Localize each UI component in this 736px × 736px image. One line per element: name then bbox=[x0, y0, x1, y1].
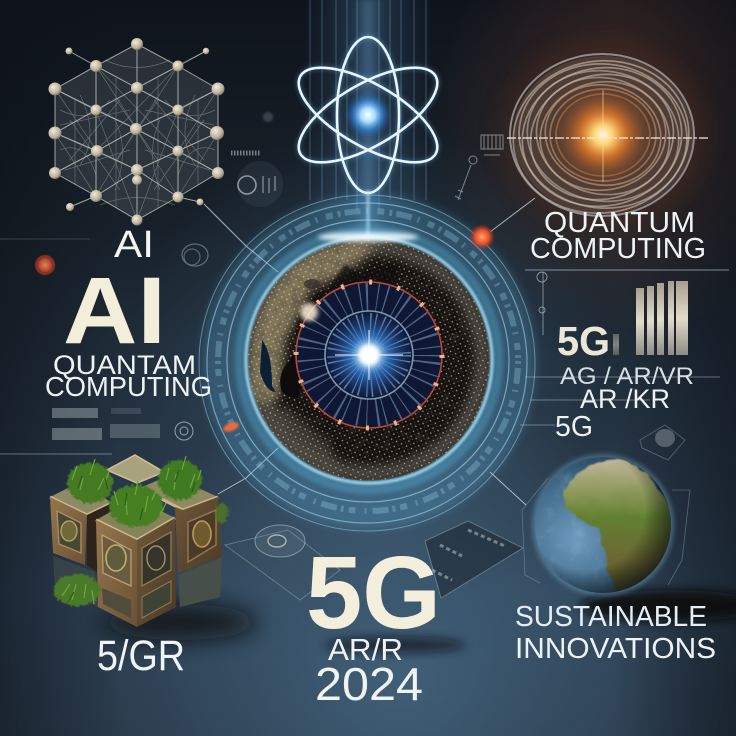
label: AI small: AI bbox=[114, 224, 154, 266]
connector lines bbox=[0, 198, 729, 505]
small key and chip icons bbox=[455, 135, 503, 200]
network nodes bbox=[48, 38, 224, 226]
outer glow bbox=[219, 212, 519, 512]
label: sustainable innovations: SUSTAINABLE bbox=[515, 601, 707, 633]
light beam above sphere bbox=[305, 0, 431, 240]
label: 5/GR: 5/GR bbox=[97, 632, 185, 680]
left block bbox=[50, 482, 112, 607]
label: AI large: AI bbox=[63, 258, 166, 364]
inner dial bbox=[296, 282, 442, 428]
atom orbits bbox=[285, 37, 451, 193]
hologram panel with eye bbox=[225, 525, 340, 600]
label: AR KR: AR /KR bbox=[580, 384, 670, 414]
faint mesh icon right bbox=[640, 425, 685, 460]
label: quantum computing right: QUANTUM bbox=[544, 207, 695, 239]
label: AR/R: AR/R bbox=[328, 632, 403, 667]
bar chart icon bbox=[613, 281, 688, 355]
faded data readouts bbox=[52, 408, 160, 440]
shadow below blocks bbox=[102, 604, 258, 640]
red flare on ring bbox=[222, 421, 240, 433]
inner blue halo bbox=[240, 231, 498, 489]
flare on sphere bbox=[300, 303, 318, 321]
network edges bbox=[55, 44, 218, 220]
small floating tech icons left bbox=[182, 112, 283, 266]
orange node top right bbox=[469, 224, 495, 250]
network fine mesh bbox=[55, 60, 218, 220]
central globe with rings bbox=[199, 195, 535, 531]
icon: atom bbox=[285, 37, 451, 193]
icon: earth globe bbox=[522, 454, 690, 600]
icon: AI hexagonal network bbox=[48, 38, 224, 226]
label: 5G right: 5G bbox=[557, 318, 610, 364]
red node left bbox=[34, 254, 56, 276]
top tile bbox=[107, 455, 164, 483]
shadow below 5G bbox=[325, 637, 465, 653]
label: sustainable innovations bbox=[515, 601, 716, 665]
small ring icon bbox=[175, 422, 193, 440]
core star bbox=[335, 330, 403, 380]
label: AG AR VR: AG / AR/VR bbox=[560, 363, 694, 390]
sphere surface bbox=[248, 239, 490, 481]
atom glow bbox=[285, 37, 451, 193]
front block bbox=[96, 498, 176, 627]
icon: quantum computing swirl bbox=[503, 45, 708, 225]
icon: sustainable blocks with moss bbox=[50, 455, 228, 627]
label: 5G large: 5G bbox=[306, 535, 441, 650]
moss clumps bbox=[54, 456, 228, 606]
label: 5G small: 5G bbox=[555, 411, 593, 443]
label: 2024: 2024 bbox=[315, 658, 423, 710]
label: quantum computing right bbox=[530, 207, 706, 265]
swirl rings bbox=[503, 49, 699, 225]
label: sustainable innovations: INNOVATIONS bbox=[515, 633, 716, 665]
horizontal light flare bbox=[507, 137, 708, 139]
label: quantam: QUANTAM bbox=[53, 350, 196, 380]
label: computing left: COMPUTING bbox=[45, 371, 212, 402]
label: quantum computing right: COMPUTING bbox=[530, 233, 706, 265]
right block bbox=[140, 475, 222, 607]
shadow below earth bbox=[580, 590, 736, 622]
rim light bbox=[246, 237, 492, 483]
dashboard panel bbox=[425, 521, 523, 598]
hud rings bbox=[199, 195, 535, 531]
